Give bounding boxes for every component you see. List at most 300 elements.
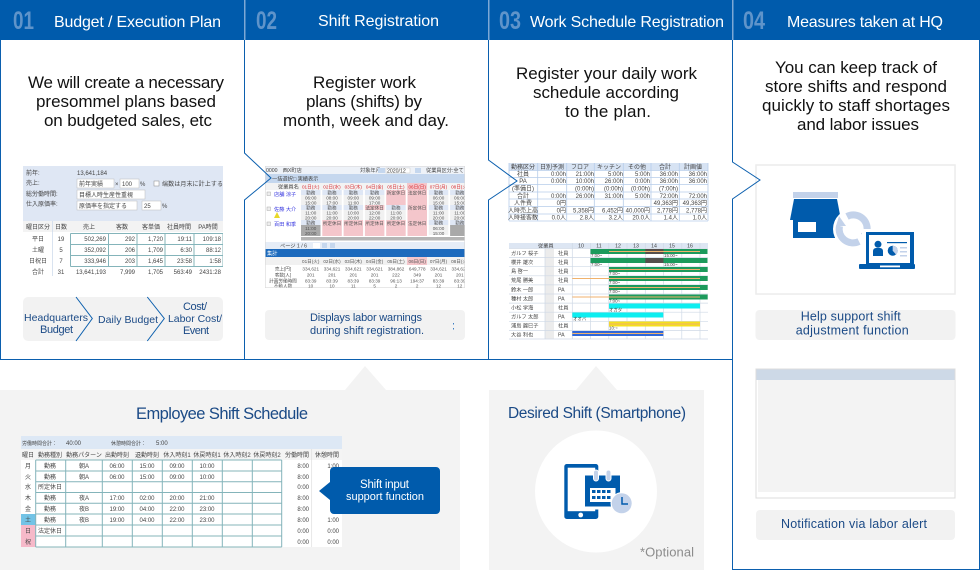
caption: labor warnings (265, 310, 465, 340)
screenshot: staff time bars: 社員 (558, 267, 568, 275)
screenshot: shift registration grid: 百田 和季 (274, 220, 296, 228)
screenshot: budget form table: 203 (125, 259, 136, 265)
screenshot: shift registration grid: 法定休日 (408, 220, 426, 227)
screenshot: shift registration grid: 勤務 (434, 220, 443, 226)
screenshot: shift registration grid: 勤務 (391, 204, 401, 212)
table: employee shift schedule: 09:00 (169, 475, 185, 481)
screenshot: shift registration grid: 11:00 (326, 210, 338, 216)
screenshot: shift registration grid: 22:00 (369, 216, 381, 220)
screenshot: budget form table: 原価率を指定する (79, 202, 127, 210)
screenshot: budget form table: 13,641,193 (76, 270, 107, 276)
table: employee shift schedule: 木 (25, 494, 31, 502)
screenshot: staff time bars: 社員 (558, 258, 568, 266)
screenshot: shift registration grid (265, 166, 470, 290)
callout: shift input support function: support function (346, 491, 424, 503)
screenshot: staff time bars: 11 (596, 244, 602, 250)
table: employee shift schedule: 8:00 (297, 518, 310, 524)
screenshot: staff time bars: 島 啓一 (511, 267, 528, 275)
screenshot: staff time bars: オガタ (609, 306, 622, 314)
screenshot: labor summary table: 0:00h (635, 179, 650, 185)
screenshot: labor summary table: キッチン (597, 164, 621, 171)
screenshot: shift registration grid: 10 (329, 284, 335, 288)
screenshot: shift registration grid: 20:00 (433, 216, 445, 220)
table: employee shift schedule: 8:00 (297, 475, 310, 481)
header: step 02 (244, 0, 488, 40)
screenshot: shift registration grid: 20:00 (454, 216, 466, 220)
screenshot: budget form table: 5 (59, 248, 63, 254)
screenshot: labor summary table: 人時接客数 (508, 214, 538, 222)
table: employee shift schedule: 21:00 (199, 496, 215, 502)
table: employee shift schedule: 10:00 (199, 464, 215, 470)
screenshot: budget form table: 仕入原価率: (26, 200, 58, 208)
screenshot: shift registration grid: 勤務 (370, 190, 380, 196)
screenshot: shift registration grid: 349 (413, 272, 421, 278)
screenshot: shift registration grid: 勤務 (327, 204, 337, 212)
screenshot: labor summary table: 5,358円 (573, 208, 594, 214)
icon: store (790, 192, 841, 238)
screenshot: budget form table: 109:18 (203, 237, 222, 243)
screenshot: staff time bars (509, 242, 708, 339)
screenshot: shift registration grid: 11:00 (390, 210, 402, 216)
screenshot: staff time bars: ガルフ 太郎 (511, 312, 538, 320)
screenshot: shift registration grid: 02日(水) (323, 184, 341, 190)
screenshot: labor summary table: 72:00h (689, 194, 707, 200)
table: employee shift schedule: 10:00 (199, 475, 215, 481)
screenshot: budget form table: 1,705 (148, 270, 164, 276)
screenshot: shift registration grid: 一括選択 (272, 174, 294, 182)
screenshot: staff time bars: 鈴木 一郎 (511, 286, 533, 294)
screenshot: labor summary table: 0円 (557, 208, 566, 214)
description: step 02 (283, 73, 449, 130)
screenshot: labor summary table: 2,778円 (686, 208, 707, 214)
caption: labor alert (756, 510, 955, 540)
panel: step 02 shift registration (244, 0, 488, 340)
screenshot: shift registration grid: 04日(金) (366, 258, 384, 265)
screenshot: shift registration grid: 17:00 (326, 200, 338, 206)
description: step 01: presommel plans based (36, 92, 216, 111)
callout: shift input support function (319, 467, 440, 514)
screenshot: shift registration grid: 09:00 (348, 196, 359, 200)
table: employee shift schedule: 祝 (25, 538, 31, 546)
screenshot: shift registration grid: 所定休日 (387, 220, 405, 227)
screenshot: shift registration grid: 08日(火) (451, 259, 469, 265)
screenshot: shift registration grid: 12 (457, 284, 463, 288)
screenshot: budget form table: PA時間 (198, 223, 218, 231)
screenshot: shift registration grid: 201 (371, 272, 379, 278)
screenshot: staff time bars: 14 (651, 244, 657, 250)
screenshot: shift registration grid: 05日(土) (387, 184, 405, 190)
screenshot: shift registration grid: 83:39 (369, 278, 381, 284)
screenshot: labor summary table (508, 163, 708, 222)
screenshot: shift registration grid: 勤務 (349, 204, 358, 212)
screenshot: labor summary table: 3.2人 (609, 214, 623, 222)
table: employee shift schedule: 0:00 (297, 485, 310, 491)
screenshot: staff time bars: 15 (669, 244, 675, 250)
screenshot: budget form table: 社員時間 (167, 223, 191, 231)
screenshot: staff time bars: オオバ (573, 316, 587, 322)
screenshot: shift registration grid: 06日(日) (409, 259, 426, 265)
flow: headquarters budget to daily budget to cost: Headquarters (24, 312, 88, 324)
screenshot: shift registration grid: 0000 西X町店 (266, 167, 302, 174)
screenshot: staff time bars: ガルフ 桜子 (511, 249, 538, 257)
screenshot: budget form table: 7,999 (120, 270, 136, 276)
screenshot: shift registration grid: 20:00 (326, 216, 338, 220)
screenshot: shift registration grid: 02日(水) (323, 258, 341, 265)
table: employee shift schedule: 8:00 (297, 496, 310, 502)
screenshot: shift registration grid: 20:00 (305, 231, 317, 236)
screenshot: staff time bars: 7:00~ (609, 271, 621, 276)
table: employee shift schedule: 休入時刻2 (223, 451, 251, 459)
table: employee shift schedule: 0:00 (297, 529, 310, 535)
screenshot: staff time bars: 13 (633, 244, 639, 250)
table: employee shift schedule: 06:00 (109, 475, 125, 481)
description: step 02: month, week and day. (283, 111, 449, 130)
screenshot: shift registration grid: 勤務 (455, 204, 465, 212)
screenshot: shift registration grid: 06:00 (454, 196, 466, 200)
table: employee shift schedule: 04:00 (139, 507, 155, 513)
table: employee shift schedule: 23:00 (199, 518, 215, 524)
table: employee shift schedule: 0:00 (327, 540, 340, 546)
screenshot: shift registration grid: 10:00 (348, 210, 359, 216)
screenshot: shift registration grid: 対象年月: (360, 166, 382, 174)
screenshot: shift registration grid: 計画労働時間 (269, 278, 297, 284)
screenshot: shift registration grid: 15:00 (454, 200, 466, 206)
table: employee shift schedule: 1:00 (327, 518, 340, 524)
screenshot: staff time bars: 15:00~ (664, 262, 678, 267)
screenshot: budget form table: 2431:28 (199, 270, 222, 276)
screenshot: shift registration grid: 384,862 (388, 266, 405, 272)
screenshot: shift registration grid: 5 (373, 284, 376, 288)
image frame: store and HQ sync (756, 165, 955, 294)
screenshot: budget form table: 日祝日 (29, 257, 47, 265)
screenshot: labor summary table: 10:00h (576, 179, 594, 185)
screenshot: labor summary table: 合計 (659, 163, 671, 171)
screenshot: labor summary table: (0:00h) (575, 186, 594, 192)
table: employee shift schedule: 1:00 (327, 464, 340, 470)
heading: desired shift: Desired Shift (Smartphone) (508, 405, 686, 422)
header: step 01 (0, 0, 244, 40)
description: step 04 (762, 58, 950, 134)
screenshot: shift registration grid: 売上[円] (275, 266, 291, 272)
screenshot: shift registration grid: 201 (435, 272, 443, 278)
screenshot: labor summary table: (0:00h) (631, 186, 650, 192)
screenshot: shift registration grid: 所定休日 (365, 220, 384, 227)
screenshot: budget form table: 502,269 (84, 237, 107, 243)
screenshot: budget form table: 6:30 (180, 248, 193, 254)
screenshot: shift registration grid: 不動人数 (274, 282, 293, 290)
screenshot: budget form table: 目標人時生産性重視 (79, 191, 133, 199)
screenshot: shift registration grid: 201 (456, 272, 464, 278)
screenshot: shift registration grid: 03日(木) (345, 258, 362, 265)
table: employee shift schedule: 法定休日 (38, 527, 62, 535)
screenshot: shift registration grid: 15:00 (433, 231, 445, 236)
description: step 02: Register work (313, 73, 416, 92)
screenshot: shift registration grid: 従業員区分:全て (426, 166, 464, 174)
screenshot: budget form table: 合計 (32, 268, 44, 276)
caption: help support (756, 310, 956, 340)
screenshot: labor summary table: 5:00h (635, 172, 650, 178)
table: employee shift schedule: 22:00 (169, 507, 185, 513)
screenshot: budget form table: 1,709 (148, 248, 164, 254)
callout: shift input support function: Shift input (360, 479, 410, 491)
table: employee shift schedule: 金 (25, 505, 31, 513)
screenshot: shift registration grid: 07日(月) (430, 184, 448, 190)
screenshot: shift registration grid: 勤務 (455, 190, 465, 196)
table: employee shift schedule: 夜A (79, 494, 89, 502)
screenshot: labor summary table: 49,363円 (654, 200, 678, 207)
table: employee shift schedule: 23:00 (199, 507, 215, 513)
image frame: labor alert placeholder (756, 369, 955, 498)
header: step 04: Measures taken at HQ (787, 14, 943, 31)
screenshot: budget form table: 曜日区分 (26, 223, 50, 231)
table: employee shift schedule: 休戻時刻1 (193, 451, 221, 459)
screenshot: labor summary table: 0円 (557, 200, 566, 207)
table: employee shift schedule: 朝A (79, 473, 89, 481)
screenshot: shift registration grid: 194:37 (410, 278, 425, 284)
screenshot: labor summary table: (準備日) (512, 184, 534, 192)
screenshot: budget form table: 13,641,184 (77, 171, 108, 177)
table: employee shift schedule: 休入時刻1 (163, 451, 191, 459)
screenshot: shift registration grid: 01日(火) (302, 259, 320, 265)
header: step 01: 01 (13, 7, 34, 35)
table: employee shift schedule: 休憩時間 (315, 451, 339, 459)
screenshot: labor summary table: 40,000円 (626, 208, 650, 214)
icon: sync arrows (833, 209, 873, 249)
screenshot: shift registration grid: 勤務 (349, 190, 358, 196)
screenshot: staff time bars: 15:00~ (664, 253, 678, 258)
screenshot: shift registration grid: 334,621 (366, 266, 383, 272)
screenshot: shift registration grid: 03日(木) (345, 184, 362, 190)
screenshot: labor summary table: 0:00h (551, 172, 566, 178)
screenshot: labor summary table: 6,452円 (602, 208, 623, 214)
screenshot: shift registration grid: 06:00 (305, 196, 317, 200)
screenshot: staff time bars: 従業員 (538, 242, 554, 250)
screenshot: budget form table: 333,946 (84, 259, 107, 265)
header: step 03: Work Schedule Registration (530, 14, 724, 31)
screenshot: shift registration grid: 09:00 (369, 196, 381, 200)
table: employee shift schedule: 5:00 (156, 441, 168, 447)
note: optional: *Optional (640, 545, 694, 560)
table: employee shift schedule: 06:00 (109, 464, 125, 470)
table: employee shift schedule: 土 (25, 516, 31, 524)
flow: headquarters budget to daily budget to cost: Daily Budget (98, 314, 158, 326)
screenshot: labor summary table: 勤務区分 (511, 163, 535, 171)
screenshot: budget form table: 206 (125, 248, 136, 254)
screenshot: labor summary table: 2.8人 (580, 214, 594, 222)
screenshot: shift registration grid: 83:39 (433, 278, 445, 284)
screenshot: labor summary table: 人件費 (514, 199, 532, 207)
table: employee shift schedule: 20:00 (169, 496, 185, 502)
screenshot: budget form table: 総労働時間: (26, 190, 58, 198)
screenshot: shift registration grid: 勤務 (306, 220, 316, 226)
screenshot: shift registration grid: 従業員名 (278, 182, 299, 190)
screenshot: shift registration grid: 勤務 (434, 190, 443, 196)
screenshot: labor summary table: 26:00h (605, 179, 623, 185)
screenshot: labor summary table: 合計 (517, 192, 529, 200)
table: employee shift schedule: 休戻時刻2 (253, 451, 281, 459)
screenshot: staff time bars: 種村 太郎 (511, 294, 533, 302)
table: employee shift schedule: 日 (25, 528, 31, 535)
panel: desired shift smartphone (489, 366, 704, 570)
table: employee shift schedule: 曜日 (22, 452, 34, 459)
caption: help support: Help support shift (801, 310, 901, 324)
screenshot: labor summary table: 36:00h (689, 179, 707, 185)
screenshot: staff time bars: 櫻井 雄次 (511, 258, 534, 266)
description: step 03: Register your daily work (516, 64, 698, 83)
screenshot: shift registration grid: 334,621 (345, 266, 362, 272)
screenshot: shift registration grid: 201 (349, 272, 358, 278)
screenshot: staff time bars: 7:00~ (609, 280, 621, 285)
screenshot: shift registration grid: 勤務 (306, 204, 316, 212)
header: step 01: Budget / Execution Plan (54, 14, 221, 31)
screenshot: staff time bars: 小松 学海 (511, 304, 534, 312)
screenshot: labor summary table: 0:00h (551, 194, 566, 200)
screenshot: shift registration grid: 客数[人] (275, 272, 291, 278)
screenshot: staff time bars: 社員 (558, 304, 568, 312)
screenshot: shift registration grid: 所定休日 (344, 220, 362, 227)
screenshot: shift registration grid: 06:00 (433, 226, 445, 231)
table: employee shift schedule: 月 (25, 463, 31, 470)
table: employee shift schedule: 40:00 (66, 441, 82, 447)
screenshot: shift registration grid: 10 (308, 284, 314, 288)
screenshot: labor summary table: 36:00h (660, 179, 678, 185)
screenshot: budget form table: 25 (144, 204, 151, 210)
screenshot: budget form table: % (140, 182, 146, 188)
screenshot: shift registration grid: 12:00 (369, 210, 381, 216)
caption: labor warnings: during shift registration. (310, 325, 424, 337)
screenshot: shift registration grid: 06:00 (433, 196, 445, 200)
screenshot: labor summary table: 計画値 (684, 163, 702, 171)
header: step 04: 04 (743, 7, 765, 35)
screenshot: shift registration grid: 勤務 (327, 190, 337, 196)
screenshot: shift registration grid: 所定休日 (387, 190, 405, 196)
table: employee shift schedule: 19:00 (109, 507, 125, 513)
screenshot: budget form table: 土曜 (32, 246, 44, 254)
screenshot: shift registration grid: 法定休日 (365, 204, 384, 212)
screenshot: budget form table: 端数は月末に計上する (162, 180, 223, 188)
screenshot: shift registration grid: 11:00 (305, 226, 317, 231)
screenshot: shift registration grid: 法定休日 (408, 190, 426, 196)
panel: employee shift schedule (0, 366, 460, 570)
screenshot: shift registration grid: 11:00 (305, 210, 317, 216)
screenshot: staff time bars: PA (558, 296, 565, 302)
table: employee shift schedule: 出勤時刻 (105, 451, 129, 459)
screenshot: shift registration grid: 11:00 (454, 210, 466, 216)
screenshot: budget form table: 19:11 (177, 237, 193, 243)
table: employee shift schedule: 火 (25, 474, 31, 481)
screenshot: labor summary table: PA (519, 179, 527, 185)
screenshot: budget form table: % (162, 204, 168, 210)
screenshot: staff time bars: 社員 (558, 322, 568, 330)
screenshot: shift registration grid: 20:00 (390, 216, 402, 220)
screenshot: budget form table: 客単価 (142, 223, 160, 231)
table: employee shift schedule: 19:00 (109, 518, 125, 524)
screenshot: labor summary table: 社員 (517, 170, 529, 178)
description: step 04: You can keep track of (775, 58, 937, 77)
table: employee shift schedule: 夜B (79, 516, 89, 524)
header: step 02: Shift Registration (318, 13, 439, 30)
screenshot: shift registration grid: 勤務 (306, 190, 316, 196)
screenshot: budget form table: 100 (122, 182, 133, 188)
screenshot: budget form table: 1:58 (209, 259, 222, 265)
flow: headquarters budget to daily budget to cost: Budget (40, 324, 73, 336)
screenshot: budget form table: 日数 (55, 223, 67, 231)
table: employee shift schedule: 勤務 (44, 516, 56, 524)
screenshot: shift registration grid: 15:00 (305, 200, 317, 206)
screenshot: shift registration grid: 勤務 (434, 204, 443, 212)
screenshot: budget form table: 7 (59, 259, 63, 265)
screenshot: shift registration grid: 96:13 (390, 278, 402, 284)
screenshot: labor summary table: 36:00h (660, 172, 678, 178)
screenshot: labor summary table: 31:00h (605, 194, 623, 200)
table: employee shift schedule: 02:00 (139, 496, 155, 502)
screenshot: shift registration grid: 83:39 (326, 278, 338, 284)
screenshot: shift registration grid: 11:00 (348, 200, 359, 206)
screenshot: labor summary table: 0:00h (551, 179, 566, 185)
screenshot: shift registration grid: 201 (328, 272, 336, 278)
screenshot: budget form table: 平日 (32, 236, 44, 243)
screenshot: shift registration grid: □ 実績表示 (293, 174, 318, 182)
screenshot: shift registration grid: 334,621 (324, 266, 341, 272)
table: employee shift schedule: 0:00 (297, 540, 310, 546)
panel: step 04 measures taken at HQ (732, 0, 980, 540)
screenshot: staff time bars: 16 (687, 244, 693, 250)
screenshot: staff time bars: 7:00~ (609, 298, 621, 304)
table: employee shift schedule: 22:00 (169, 518, 185, 524)
screenshot: shift registration grid: 01日(火) (302, 184, 320, 190)
table: employee shift schedule: 退勤時刻 (135, 451, 159, 459)
screenshot: shift registration grid: 334,621 (430, 266, 447, 272)
screenshot: labor summary table: 0.0人 (552, 214, 566, 222)
screenshot: shift registration grid: 07日(月) (430, 259, 448, 265)
screenshot: staff time bars: 10 (578, 244, 584, 250)
screenshot: labor summary table: 1.0人 (693, 214, 707, 222)
screenshot: shift registration grid: 所定休日 (323, 220, 341, 227)
white circle (535, 430, 657, 552)
screenshot: shift registration grid: 08:00 (326, 196, 338, 200)
table: employee shift schedule: 09:00 (169, 464, 185, 470)
screenshot: budget form table: 31 (58, 270, 65, 276)
screenshot: shift registration grid: 83:39 (305, 278, 317, 284)
screenshot: shift registration grid: 649,778 (409, 266, 426, 272)
screenshot: shift registration grid: 集計 (267, 249, 278, 257)
description: step 01 (28, 73, 224, 130)
description: step 02: plans (shifts) by (306, 92, 422, 111)
screenshot: budget form table: 売上: (26, 179, 40, 187)
table: employee shift schedule: 8:00 (297, 464, 310, 470)
screenshot: budget form table: 1,720 (148, 237, 164, 243)
table: employee shift schedule: 朝A (79, 462, 89, 470)
screenshot: labor summary table: 1.4人 (664, 214, 678, 222)
screenshot: shift registration grid: 20:00 (305, 216, 317, 220)
caption: labor alert: Notification via labor alert (781, 517, 928, 531)
table: employee shift schedule: 0:00 (327, 529, 340, 535)
screenshot: labor summary table: 49,363円 (683, 200, 707, 207)
caption: help support: adjustment function (796, 324, 909, 338)
description: step 04: store shifts and respond (765, 77, 947, 96)
screenshot: shift registration grid: 店舗 涼子 (274, 190, 296, 198)
table: employee shift schedule: 勤務 (44, 462, 56, 470)
table: employee shift schedule: 8:00 (297, 507, 310, 513)
description: step 03 (516, 64, 698, 121)
screenshot: shift registration grid: 佐藤 大介 (274, 205, 297, 213)
screenshot: staff time bars: PA (558, 288, 565, 294)
screenshot: shift registration grid: ページ 1 / 6 (280, 242, 307, 250)
screenshot: shift registration grid: 222 (392, 272, 400, 278)
table: employee shift schedule: 労働時間 (285, 451, 309, 459)
flow: headquarters budget to daily budget to cost: Labor Cost/ (168, 313, 222, 325)
screenshot: staff time bars: 社員 (558, 249, 568, 257)
